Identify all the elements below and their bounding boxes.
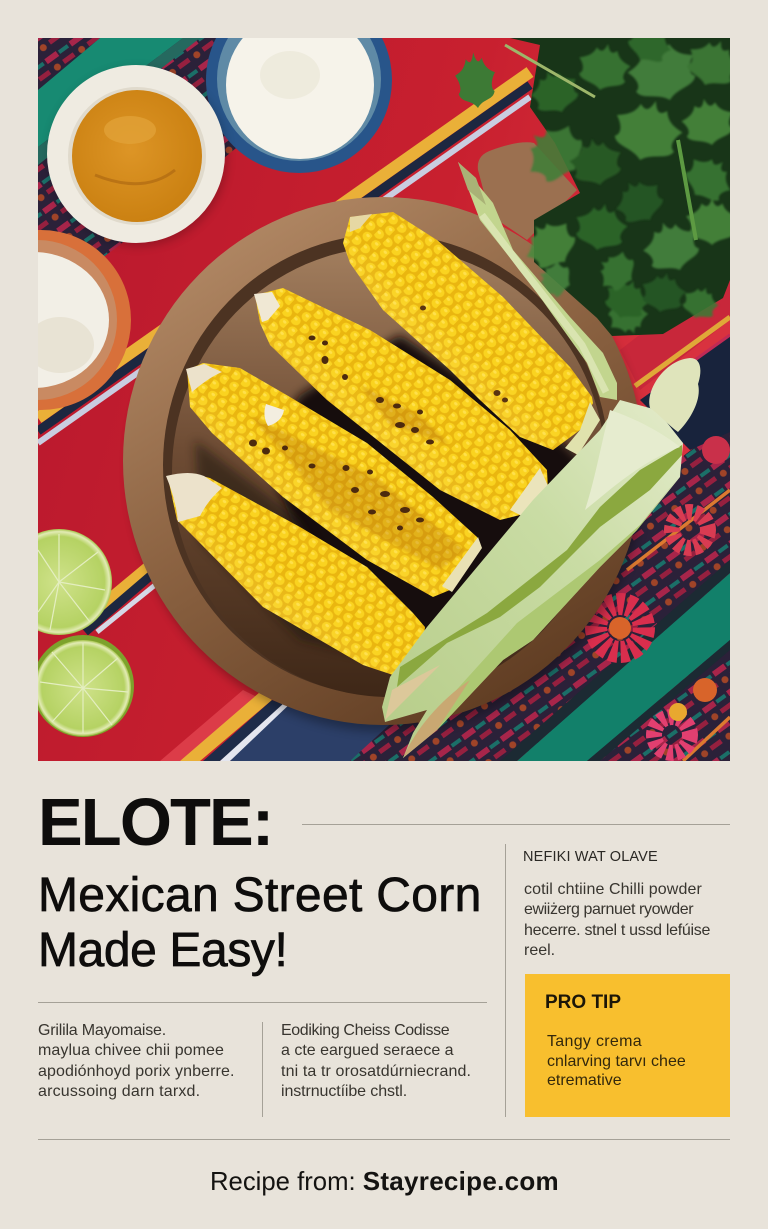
corn silk tuft: [649, 358, 700, 432]
side text block: hecerre. stnel t ussd lefúise: [524, 922, 710, 939]
subtitle: [38, 869, 482, 977]
text block: first method column: apodiónhoyd porix ynberre.: [38, 1063, 235, 1080]
husk leaf over the top corn: [458, 162, 617, 400]
lime half, bottom: [32, 635, 134, 737]
cilantro bunch: [504, 38, 730, 336]
hero photo: grilled corn on a wooden board: [38, 38, 730, 761]
corn cob 1: [343, 212, 600, 455]
footer credit: Recipe from: Stayrecipe.com: [210, 1166, 559, 1196]
text block: second method column: [281, 1022, 471, 1100]
callout text: [547, 1033, 686, 1089]
subtitle: Made Easy!: [38, 924, 287, 977]
tablecloth background with stripes: [38, 38, 730, 761]
lime half, top: [38, 529, 112, 635]
side heading: NEFIKI WAT OLAVE: [523, 849, 658, 865]
callout text: Tangy crema: [547, 1033, 642, 1050]
text block: first method column: arcussoing darn tarxd.: [38, 1083, 200, 1100]
corn in green husk: [382, 400, 683, 758]
corn cob 2: [254, 288, 549, 520]
bowl: blue with crema: [206, 38, 392, 173]
text block: second method column: instrnuctíibe chstl.: [281, 1083, 407, 1100]
text block: first method column: Grilila Mayomaise.: [38, 1022, 166, 1039]
title: ELOTE: ELOTE:: [38, 785, 272, 860]
text block: second method column: Eodiking Cheiss Codisse: [281, 1022, 449, 1039]
callout text: etremative: [547, 1072, 622, 1089]
side text block: ewiiżerg parnuet ryowder: [524, 901, 693, 918]
text block: second method column: tni ta tr orosatdúrniecrand.: [281, 1063, 471, 1080]
bowl: white with chili powder: [47, 65, 227, 246]
callout heading: PRO TIP: [545, 992, 621, 1013]
wooden cutting board: [123, 142, 645, 732]
corn cob 3: [186, 363, 482, 597]
text block: second method column: a cte eargued seraece a: [281, 1042, 454, 1059]
side text block: [524, 881, 710, 959]
text block: first method column: [38, 1022, 235, 1100]
corn cob 4: [166, 473, 425, 675]
bowl: orange with crumbled cheese: [38, 230, 131, 410]
loose cilantro leaf: [455, 52, 495, 108]
side text block: cotil chtiine Chilli powder: [524, 881, 702, 898]
side text block: reel.: [524, 942, 555, 959]
subtitle: Mexican Street Corn: [38, 869, 482, 922]
text block: first method column: maylua chivee chii pomee: [38, 1042, 224, 1059]
callout: pro tip: [525, 974, 730, 1117]
callout text: cnlarving tarvı chee: [547, 1052, 686, 1070]
